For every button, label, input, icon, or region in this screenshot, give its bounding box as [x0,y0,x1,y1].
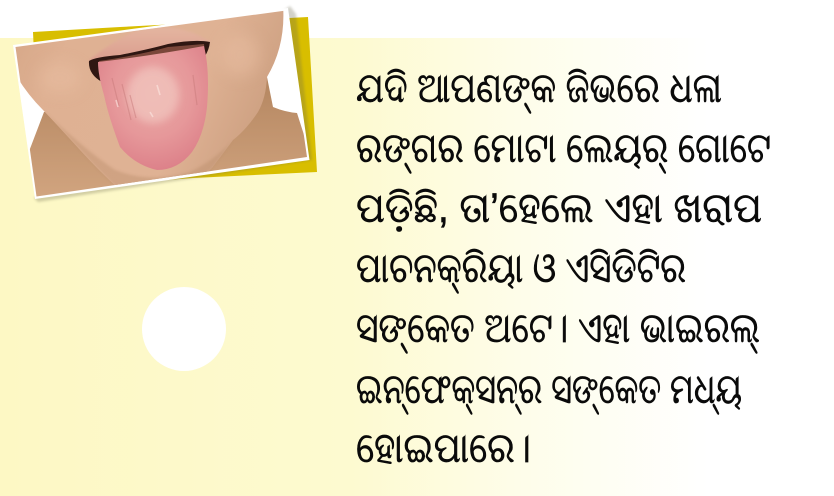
white photo frame [13,8,310,199]
photo shadow [34,6,312,202]
line 5: ସଙ୍କେତ ଅଟେ। ଏହା ଭାଇରଲ୍ [356,304,760,354]
neck [28,77,312,205]
tongue highlight and grooves [112,67,197,123]
white circle [142,287,226,371]
cheek highlight [38,62,82,94]
line 7: ହୋଇପାରେ। [356,424,531,471]
upper lip [90,27,194,60]
body text [356,64,771,471]
line 4: ପାଚନକ୍ରିୟା ଓ ଏସିଡିଟିର [356,244,686,294]
photo contents [16,10,307,196]
line 1: ଯଦି ଆପଣଙ୍କ ଜିଭରେ ଧଳା [356,64,722,114]
mouth opening [89,41,210,82]
inner mouth [99,44,204,62]
jaw shading [58,125,222,185]
line 3: ପଡ଼ିଛି, ତା’ହେଲେ ଏହା ଖରାପ [356,184,762,231]
face [10,5,283,190]
olive yellow backing card [33,17,317,190]
photo: tongue [13,6,317,203]
tongue [98,46,208,170]
